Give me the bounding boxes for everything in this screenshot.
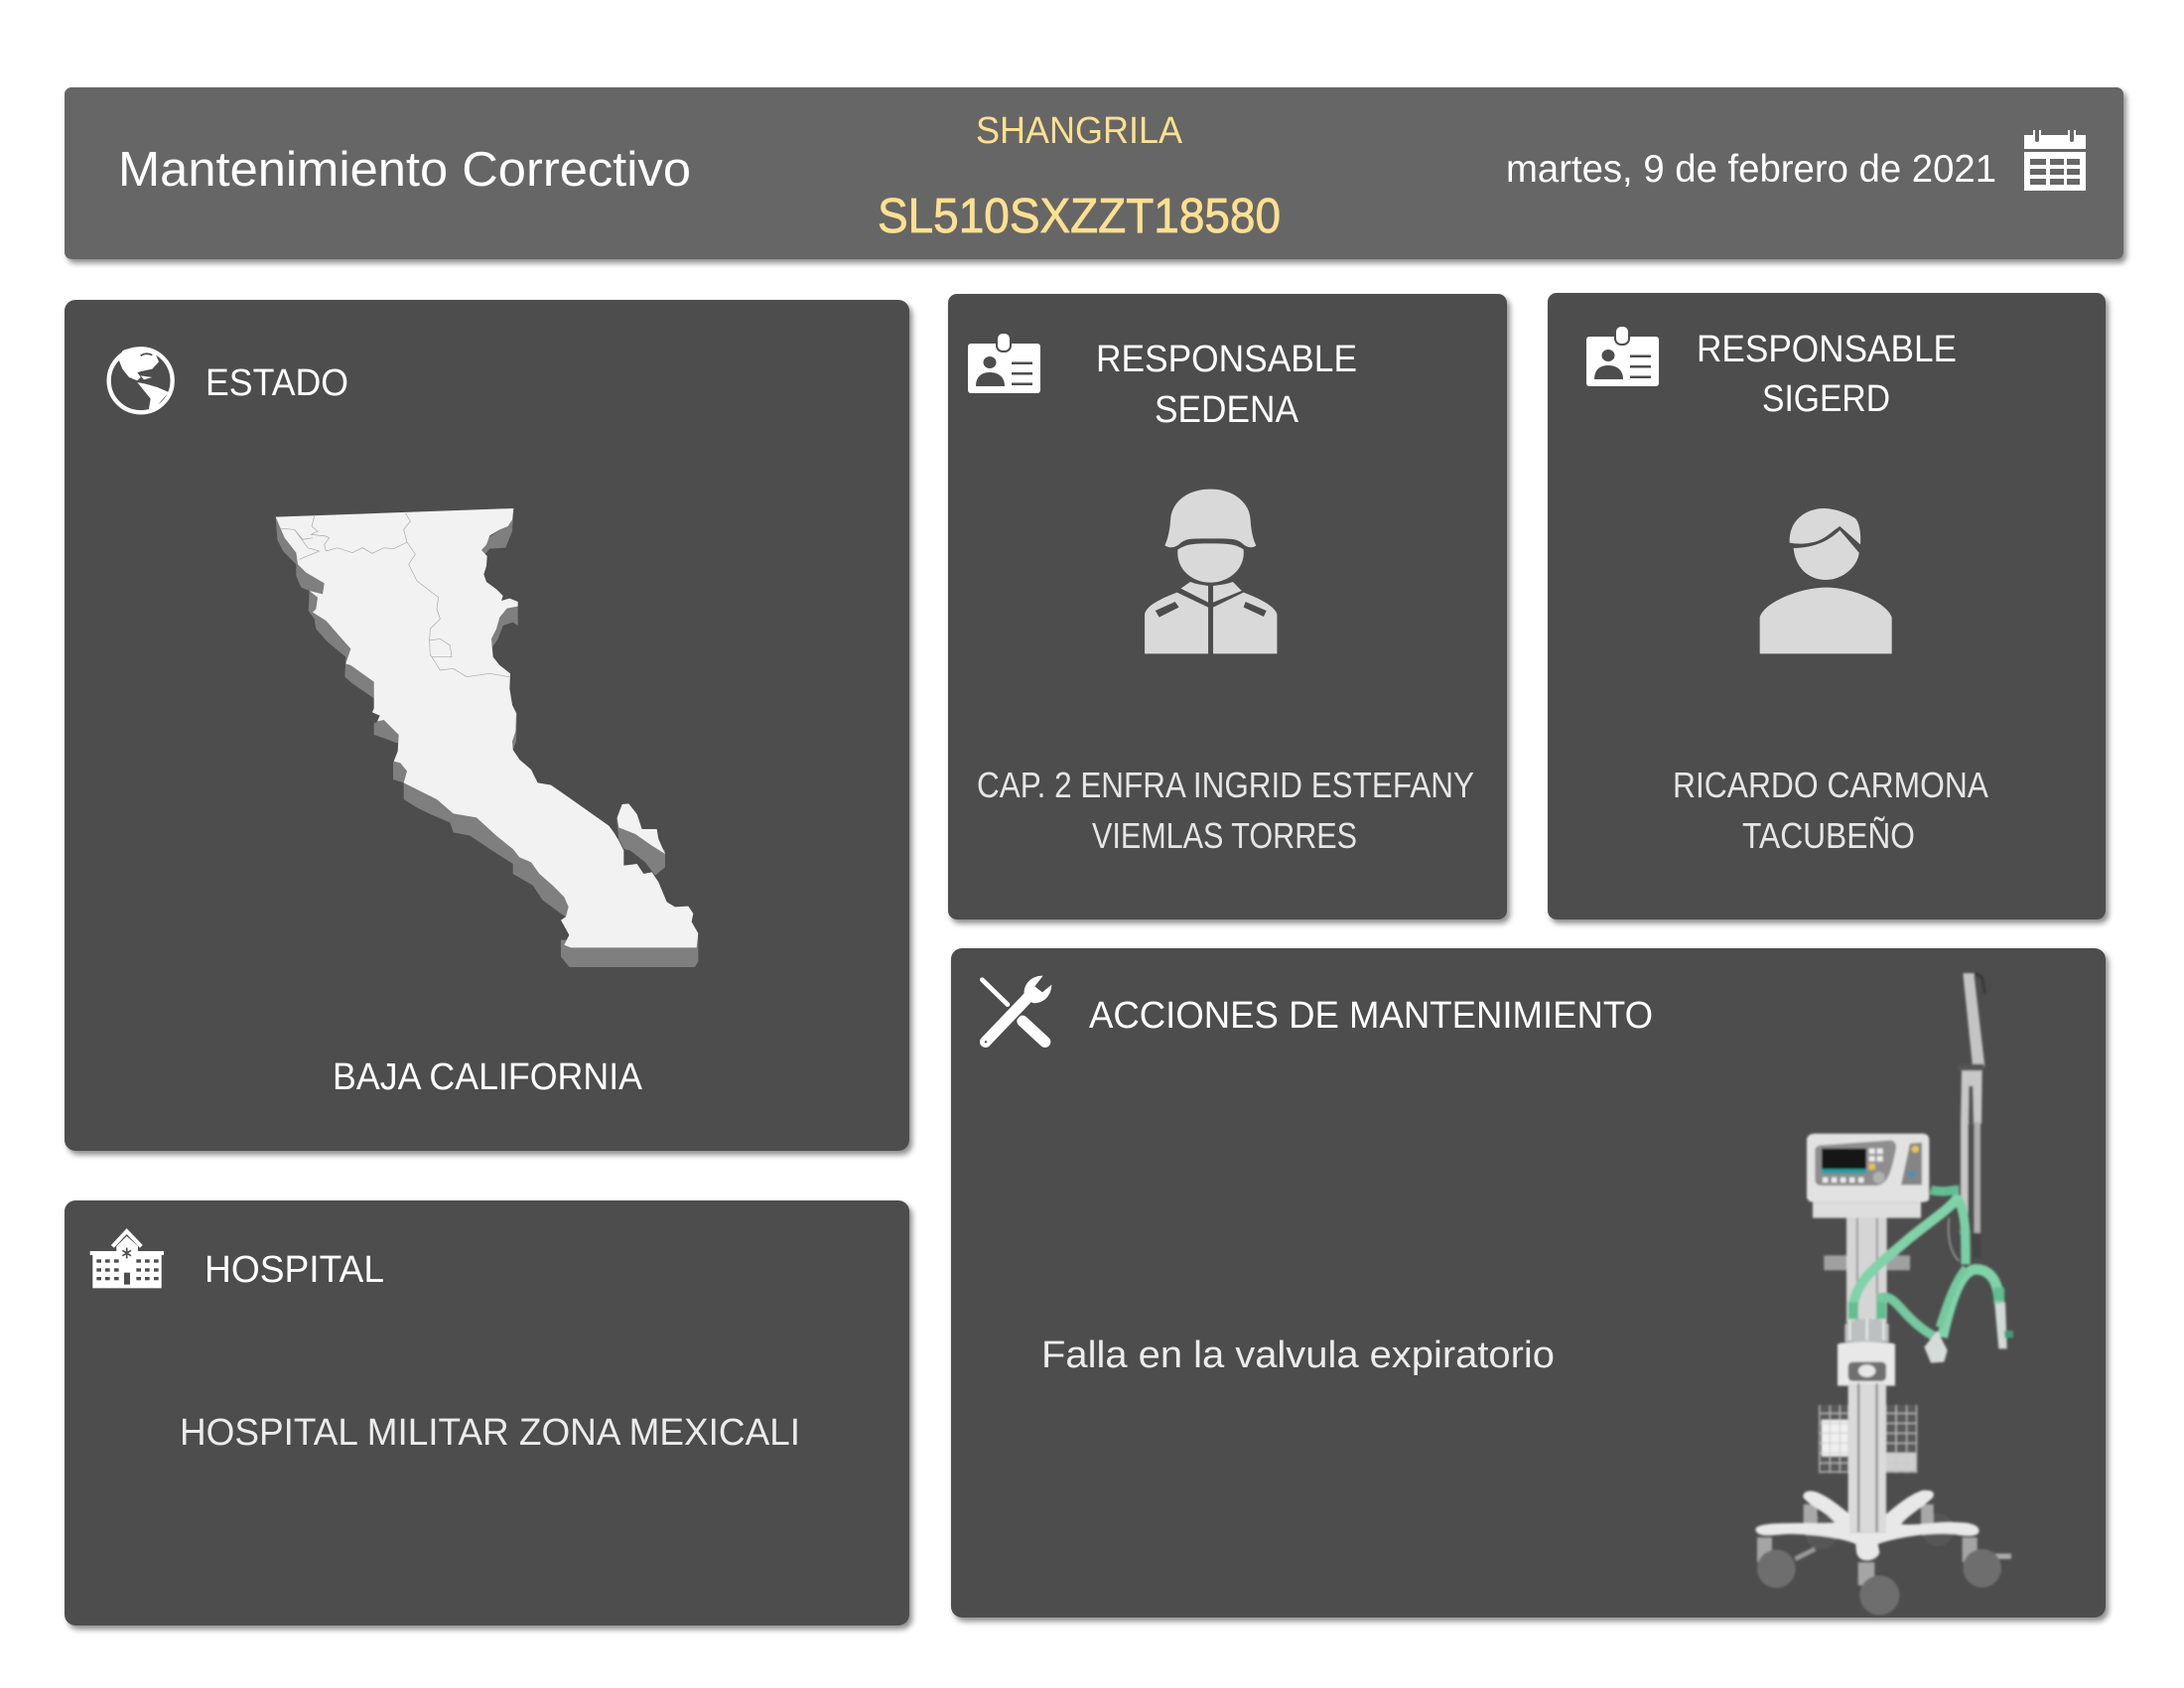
heading: responsable sigerd: RESPONSABLE xyxy=(1697,329,1957,370)
heading: hospital: HOSPITAL xyxy=(205,1249,384,1291)
heading: acciones de mantenimiento: ACCIONES DE MANTENIMIENTO xyxy=(1089,995,1653,1037)
name: responsable sigerd xyxy=(1673,765,1988,856)
state name: BAJA CALIFORNIA xyxy=(333,1056,643,1098)
title: Mantenimiento Correctivo xyxy=(118,143,691,197)
map: Baja California xyxy=(276,508,698,967)
name: responsable sedena: CAP. 2 ENFRA INGRID ESTEFANY xyxy=(977,765,1474,805)
name: responsable sedena xyxy=(977,765,1474,856)
hospital name: HOSPITAL MILITAR ZONA MEXICALI xyxy=(180,1412,800,1454)
panel: acciones de mantenimiento xyxy=(951,948,2106,1618)
serial number: SL510SXZZT18580 xyxy=(878,190,1281,243)
site name: SHANGRILA xyxy=(976,110,1183,152)
icon: wrench and screwdriver xyxy=(982,976,1051,1043)
heading: responsable sigerd: SIGERD xyxy=(1762,378,1890,420)
icon: id badge xyxy=(1586,326,1659,386)
icon: id badge xyxy=(968,333,1040,393)
date: martes, 9 de febrero de 2021 xyxy=(1506,148,1996,191)
ventilator illustration xyxy=(1755,973,2013,1616)
panel: estado xyxy=(65,300,909,1151)
name: responsable sedena: VIEMLAS TORRES xyxy=(1092,815,1357,856)
ventilator monitor and tubing xyxy=(1807,1122,2013,1386)
heading: responsable sigerd xyxy=(1697,329,1957,420)
panel: responsable sedena xyxy=(948,294,1507,919)
heading: responsable sedena: RESPONSABLE xyxy=(1096,339,1357,380)
icon: soldier xyxy=(1145,490,1277,653)
icon: hospital building xyxy=(90,1231,164,1288)
ventilator column and basket xyxy=(1755,1383,2011,1616)
ventilator pole top xyxy=(1958,973,1984,1124)
icon: globe xyxy=(109,348,173,412)
icon: person xyxy=(1760,508,1892,653)
panel: responsable sigerd xyxy=(1548,293,2106,919)
name: responsable sigerd: TACUBEÑO xyxy=(1742,815,1915,856)
heading: estado: ESTADO xyxy=(205,362,348,404)
heading: responsable sedena: SEDENA xyxy=(1155,389,1299,431)
panel: hospital xyxy=(65,1200,909,1625)
name: responsable sigerd: RICARDO CARMONA xyxy=(1673,765,1988,805)
header banner xyxy=(65,87,2123,259)
icon: calendar xyxy=(2024,130,2086,191)
maintenance description: Falla en la valvula expiratorio xyxy=(1041,1335,1555,1376)
heading: responsable sedena xyxy=(1096,339,1357,431)
